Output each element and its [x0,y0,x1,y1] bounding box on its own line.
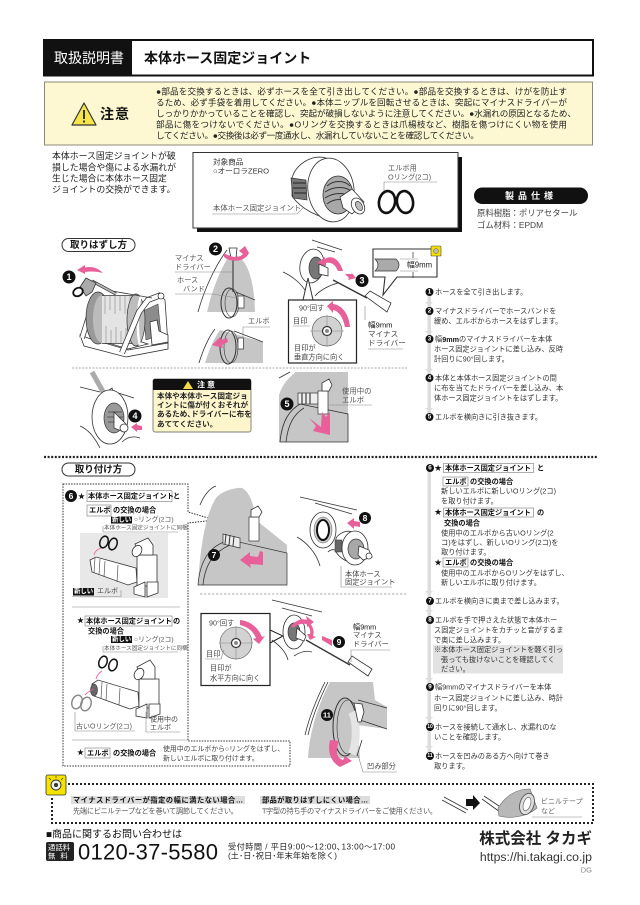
step 10: 10 [427,724,433,730]
pink arrows [291,616,314,628]
product spec: ゴム材料：EPDM [477,220,543,230]
label: vinyl tape [532,796,583,817]
case 2 heading: の [173,616,180,626]
caution text: ●部品を交換するときは、必ずホースを全て引き出してください。●部品を交換するときは、けがを防止す [156,86,567,96]
callout: turn 90 degrees counterclockwise: 目印が [294,344,316,352]
note text: 本体や本体ホース固定ジョ [157,390,248,400]
case 1 heading: エルボ [89,506,111,514]
hint 2: 部品が取りはずしにくい場合… [262,796,368,804]
step 9: 回りに90°回します。 [434,704,502,712]
step 6 [426,464,569,587]
caution panel [44,82,592,145]
step 6: ★ [434,464,442,472]
step 10: いことを確認します。 [434,732,505,742]
step 8: で奥に差し込みます。 [434,636,505,644]
reception hours [228,842,395,860]
callout: turn 90 degrees counterclockwise [288,278,356,363]
label: driver [175,254,233,272]
icon: driver and vinyl tape [442,789,537,817]
step 8: エルボを手で押さえた状態で本体ホー [435,616,557,624]
case 3 text: 新しいエルボに取り付けます。 [163,754,259,762]
new elbow tag [72,586,121,596]
step 7 illustration: insert elbow [198,486,287,585]
connector bar [425,468,433,756]
case 3 text [163,744,284,762]
intro text: 生じた場合に本体ホース固定 [52,172,167,184]
caution text: 部品に傷をつけないでください。●Oリングを交換するときは爪楊枝など、樹脂を傷つけにくい物を使用 [156,118,567,130]
hint 2 [260,796,437,816]
label: elbow in use: 使用中の [342,386,372,396]
step 6: 使用中のエルボからOリングをはずし、 [441,568,569,578]
case 1 heading: 本体ホース固定ジョイント [88,492,174,500]
step 2 illustration: hose band [175,242,255,318]
step 8 [426,616,563,674]
step 6: と [537,464,544,472]
heading: removal [62,238,135,252]
front frame [122,295,161,353]
icon: small warning [183,381,193,389]
step 3: 3 [428,336,432,342]
reception hours: 受付時間 / 平日9:00～12:00､13:00～17:00 [228,842,395,852]
step 7: エルボを横向きに奥まで差し込みます。 [435,596,564,606]
step 6: ★ [434,508,442,516]
joint part label: 本体ホース固定ジョイント [213,204,301,212]
case 2 heading: 本体ホース固定ジョイント [86,616,172,626]
step 9 illustration: driver turning back [272,600,390,676]
toll-free badge [46,842,74,861]
step 2 [426,306,562,326]
callout: turn 90 degrees counterclockwise: 目印 [293,316,307,326]
pink arrow [131,423,142,432]
caution note box: 注意 [197,380,217,390]
O-ring label: Oリング(2コ) [388,172,431,182]
step 11 [426,752,550,770]
step 8: ※本体ホース固定ジョイントを軽く引っ [434,645,563,654]
label: elbow in use: エルボ [342,396,365,404]
case 2 O-ring tag: ○リング(2コ) [134,634,174,644]
step number 11: 11 [323,710,331,720]
step number 6: 6 [69,491,74,501]
spec text: 原料樹脂：ポリアセタール [477,208,577,218]
step 6: エルボ [445,558,467,567]
step 11 illustration: wind hose [305,682,397,772]
intro text [52,150,176,194]
arrow [77,265,103,274]
label: driver: ドライバー [175,262,211,272]
old O-ring label: 古いOリング(2コ) [76,722,132,730]
panel: target product: ○オーロラZERO [213,166,269,176]
icon: hint light bulb [46,775,66,795]
case 2 heading [77,616,180,636]
caution text [156,86,576,140]
new elbow tag: エルボ [97,587,118,595]
step 6: 新しいエルボに取り付けます。 [441,578,541,587]
joint [336,531,352,562]
reel back frame [130,295,168,351]
step 8: ス固定ジョイントをカチッと音がするま [434,626,563,634]
step 6: ★ [434,558,442,567]
step 6: 6 [428,464,432,472]
label: recess: 凹み部分 [367,762,397,770]
label: 9mm driver: ドライバー [353,640,389,648]
new O-ring tag: 新しい [112,514,132,524]
footer: company: 株式会社 タカギ [479,830,592,848]
spec heading: 製品仕様 [505,190,557,201]
step 4: に布を当てたドライバーを差し込み、本 [434,384,563,392]
hint 1 [71,796,245,816]
step 5: エルボを横向きに引き抜きます。 [435,412,542,422]
caution text: しっかりかかっていることを確認し、突起が破損しないように注意してください。●水漏れの原因となるため、 [156,108,576,118]
title: 本体ホース固定ジョイント [144,50,311,66]
case 3 heading: エルボ [87,748,109,758]
target product label: 対象商品 [213,156,244,166]
callout: turn 90 degrees clockwise: 水平方向に向く [210,674,260,682]
step 8 illustration: push in joint [297,497,395,587]
case 3 heading: ★ [77,748,84,756]
label: elbow: エルボ [248,316,270,326]
installation steps text [425,464,569,770]
step 1: ホースを全て引き出します。 [435,288,527,296]
phone number: 0120-37-5580 [78,840,218,864]
step 1 illustration: hose reel [62,265,168,357]
step 5: 5 [428,414,432,420]
contact heading: ■商品に関するお問い合わせは [46,828,182,840]
step number 8: 8 [363,513,368,523]
panel: target product [193,152,462,232]
pink arrow [309,412,330,435]
step 7: 7 [428,598,432,604]
case 3 text: 使用中のエルボから○リングをはずし、 [163,744,284,753]
step 9: 9 [428,684,432,690]
new elbow tag: 新しい [74,586,94,595]
O-ring label [384,164,437,193]
intro text: 損した場合や傷による水漏れが [52,162,176,172]
callout: driver tip width [373,249,437,295]
footer: contact [46,828,395,864]
case 2 heading: 交換の場合 [88,626,125,636]
step 4: 4 [428,374,432,382]
caution text: してください。●交換後は必ず一度通水し、水漏れしていないことを確認してください。 [156,130,479,140]
step 3: 計回りに90°回します。 [434,354,509,364]
caution note box [153,379,252,432]
hint 2: T字型の持ち手のマイナスドライバーをご使用ください。 [262,806,437,816]
case 2 illustration: used elbow [70,655,180,732]
new O-ring tag: 本体ホース固定ジョイントに同梱 [104,524,188,532]
case 1 heading: の交換の場合 [113,506,157,514]
label: joint: 固定ジョイント [345,578,395,586]
step 4: 体ホース固定ジョイントをはずします。 [434,394,562,402]
step 9: 幅9mmのマイナスドライバーを本体 [435,682,551,692]
case 2 heading: ★ [77,616,84,624]
label: 9mm driver: 幅9mm [353,622,376,632]
footer: company: DG [581,866,592,874]
O-ring label: エルボ用 [388,164,417,172]
pink arrow [224,246,249,261]
reception hours: (土･日･祝日･年末年始を除く) [228,850,337,860]
intro text: ジョイントの交換ができます。 [52,184,175,194]
step 8: 張っても抜けないことを確認してく [441,655,555,664]
step 6: 使用中のエルボから古いOリング(2 [441,528,554,538]
callout: driver tip width: 幅9mm [407,260,432,270]
removal steps text [425,288,563,422]
step 8: 8 [428,616,432,624]
icon: O-rings [377,190,415,214]
heading: installation: 取り付け方 [75,464,123,476]
step 6: エルボ [445,477,467,486]
pink arrow [347,518,360,529]
label: hose band: ホース [177,276,198,284]
panel: step 6 replacement cases [63,484,290,766]
footer: company [479,830,592,874]
step 4 [426,374,563,402]
step 6: の交換の場合 [470,558,514,567]
footer: company: https://hi.takagi.co.jp [480,850,592,864]
step number 7: 7 [212,550,217,560]
step 9: ホース固定ジョイントに差し込み、時計 [434,694,563,702]
drum [86,292,110,344]
case 3 heading [77,748,157,758]
step number 2: 2 [213,244,218,254]
step 3: ホース固定ジョイントに差し込み、反時 [434,344,563,354]
step 10: ホースを接続して通水し、水漏れのな [435,722,557,732]
case 1 heading [78,490,180,516]
header bar [44,40,593,76]
step 3 illustration: driver turning [283,240,406,349]
step 1: 1 [428,288,432,296]
case 1 heading: ★ [78,492,85,500]
new O-ring tag: ○リング(2コ) [134,514,174,524]
elbow in use label: エルボ [150,724,171,732]
hint 1: 先端にビニルテープなどを巻いて調節してください。 [73,806,238,816]
step 4: 本体と本体ホース固定ジョイントの間 [435,374,557,382]
step 6: 本体ホース固定ジョイント [445,508,531,517]
label: joint [341,566,395,587]
step 6: を取り付けます。 [441,496,498,506]
heading: removal: 取りはずし方 [70,239,127,251]
icon: hint bulb small [431,246,441,256]
step 3 [426,334,563,364]
step 11: 11 [427,753,433,759]
step 6: 交換の場合 [444,518,481,528]
new O-ring tag [103,514,188,532]
label: 9mm driver [365,306,406,349]
label: 9mm driver: 幅9mm [368,320,392,330]
hose and nozzle [92,281,116,294]
intro text: 本体ホース固定ジョイントが破 [52,150,176,161]
note text [157,390,252,428]
icon: warning triangle [72,103,96,125]
note text: あててください。 [157,420,217,428]
step 4 illustration: cloth and driver [80,372,142,448]
elbow in use label [146,712,180,732]
driver [333,280,367,298]
step 6: 本体ホース固定ジョイント [445,464,531,472]
note text: イントに傷が付くおそれが [157,400,249,410]
step 2 illustration: hose removed [199,316,270,364]
pink arrows [317,257,343,271]
panel: hints [46,775,593,823]
callout: turn 90 degrees counterclockwise: 垂直方向に向く [294,352,344,362]
case 2 O-ring tag: 新しい [112,634,132,643]
toll-free badge: 通話料 [48,843,71,852]
step 2: マイナスドライバーでホースバンドを [435,306,556,316]
step 6: 新しいエルボに新しいOリング(2コ) [441,486,556,496]
label: vinyl tape: など [541,808,555,816]
step 8: ださい。 [441,664,470,674]
connector bar [425,292,433,418]
step number 4: 4 [132,411,138,421]
step 3: 幅9mmのマイナスドライバーを本体 [435,334,552,344]
callout: turn 90 degrees clockwise: 90°回す [209,618,234,628]
callout: turn 90 degrees clockwise: 目印 [206,650,220,658]
step number 6 [65,490,77,502]
case 1 heading: と [173,492,180,500]
case 1 illustration: new elbow [72,533,168,598]
callout: turn 90 degrees counterclockwise: 90°回す [299,304,324,312]
step 6: の交換の場合 [470,477,514,486]
step number 3: 3 [359,276,365,286]
caution text: るため、必ず手袋を着用してください。●本体ニップルを回転させるときは、突起にマイナスドライバーが [156,96,567,108]
label: elbow in use [328,386,372,405]
label: hose band [175,276,238,298]
step 10 [426,722,557,742]
label: joint: 本体ホース [345,570,381,578]
label: 9mm driver: マイナス [368,330,398,338]
step 6: の [537,508,544,517]
step 2: 緩め、エルボからホースをはずします。 [434,316,562,326]
step 2: 2 [428,308,432,314]
label: driver: マイナス [175,254,204,262]
step 6: コ)をはずし、新しいOリング(2コ)を [441,538,558,547]
pink arrow [240,551,263,568]
case 3 heading: の交換の場合 [113,748,157,758]
step 11: 取ります。 [434,762,469,770]
pink arrow [329,740,352,767]
label: vinyl tape: ビニルテープ [541,796,583,806]
step number 5: 5 [284,399,290,409]
caution heading: 注意 [100,106,130,122]
label: 9mm driver: マイナス [353,630,382,640]
heading: installation [62,463,135,476]
manual label: 取扱説明書 [54,50,124,66]
case 2 O-ring tag: 本体ホース固定ジョイントに同梱 [104,644,188,652]
note text: あるため､ドライバーに布を [157,408,252,418]
toll-free badge: 無料 [48,852,73,860]
label: 9mm driver: ドライバー [368,338,406,348]
callout: turn 90 degrees clockwise [201,614,283,686]
step number 1: 1 [66,272,72,282]
step 5 illustration: pull out elbow [279,372,372,442]
product spec [474,188,588,230]
hint 1: マイナスドライバーが指定の幅に満たない場合… [73,796,243,804]
case 2 O-ring tag [103,634,188,652]
icon: joint illustration [291,155,367,225]
callout: turn 90 degrees clockwise: 目印が [210,664,232,672]
step 6: 取り付けます。 [441,548,491,556]
step 9 [426,682,563,712]
elbow in use label: 使用中の [150,714,178,724]
label: 9mm driver [351,622,390,662]
label: hose band: バンド [183,284,205,294]
step 11: ホースを凹みのある方へ向けて巻き [435,752,550,760]
step number 9: 9 [337,637,342,647]
